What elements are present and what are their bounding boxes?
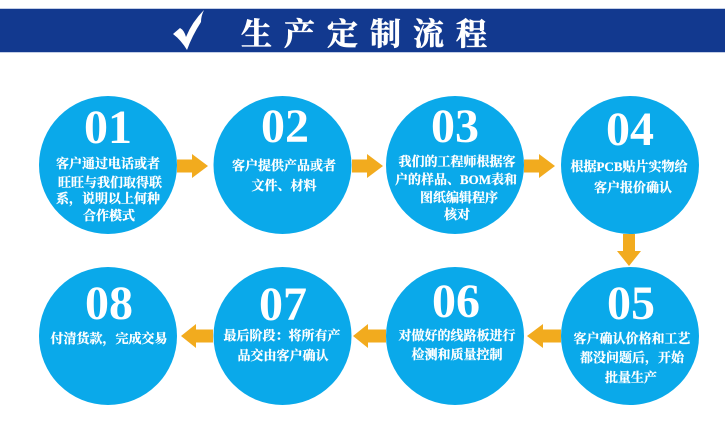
step 03: 03 — [431, 100, 479, 153]
step 01 — [39, 96, 177, 234]
step 03 — [386, 96, 524, 234]
step 02 — [214, 96, 352, 234]
step 06 — [386, 267, 524, 405]
step 07: 品交由客户确认 — [237, 348, 329, 363]
step 08: 08 — [85, 277, 133, 330]
step 03: 图纸编辑程序 — [420, 190, 498, 205]
step 08 — [39, 267, 177, 405]
step 03: 我们的工程师根据客 — [398, 154, 516, 169]
step 04 — [561, 96, 699, 234]
step 05: 客户确认价格和工艺 — [573, 331, 691, 346]
arrow: 02 to 03 — [352, 154, 383, 178]
step 06: 06 — [432, 275, 480, 328]
arrow: 05 to 06 — [527, 324, 561, 348]
step 08: 付清货款，完成交易 — [50, 331, 168, 347]
arrow: 06 to 07 — [353, 324, 386, 348]
step 04: 根据PCB贴片实物给 — [570, 159, 688, 174]
arrow: 04 to 05 — [617, 234, 641, 266]
arrow: 07 to 08 — [181, 324, 213, 348]
title: 生产定制流程 — [241, 17, 487, 52]
step 02: 02 — [261, 100, 309, 153]
icon: check mark — [173, 10, 204, 50]
step 07: 07 — [259, 278, 307, 331]
step 04: 04 — [606, 103, 654, 156]
arrow: 03 to 04 — [524, 154, 555, 178]
step 02: 客户提供产品或者 — [232, 158, 336, 173]
step 01: 系，说明以上何种 — [56, 191, 160, 207]
step 02: 文件、材料 — [251, 178, 317, 193]
step 01: 旺旺与我们取得联 — [58, 175, 162, 190]
step 01: 合作模式 — [83, 208, 135, 223]
step 06: 检测和质量控制 — [411, 347, 503, 362]
step 05: 都没问题后，开始 — [580, 350, 685, 366]
step 05: 批量生产 — [605, 370, 657, 385]
step 05: 05 — [607, 277, 655, 330]
step 03: 核对 — [444, 207, 470, 222]
arrow: 01 to 02 — [177, 154, 208, 178]
step 05 — [561, 267, 699, 405]
step 01: 客户通过电话或者 — [56, 156, 160, 171]
step 07 — [214, 267, 352, 405]
step 03: 户的样品、BOM表和 — [395, 172, 517, 187]
header banner — [0, 8, 725, 53]
step 06: 对做好的线路板进行 — [398, 328, 516, 343]
step 07: 最后阶段：将所有产 — [223, 328, 341, 343]
step 04: 客户报价确认 — [594, 180, 672, 195]
step 01: 01 — [84, 101, 132, 154]
